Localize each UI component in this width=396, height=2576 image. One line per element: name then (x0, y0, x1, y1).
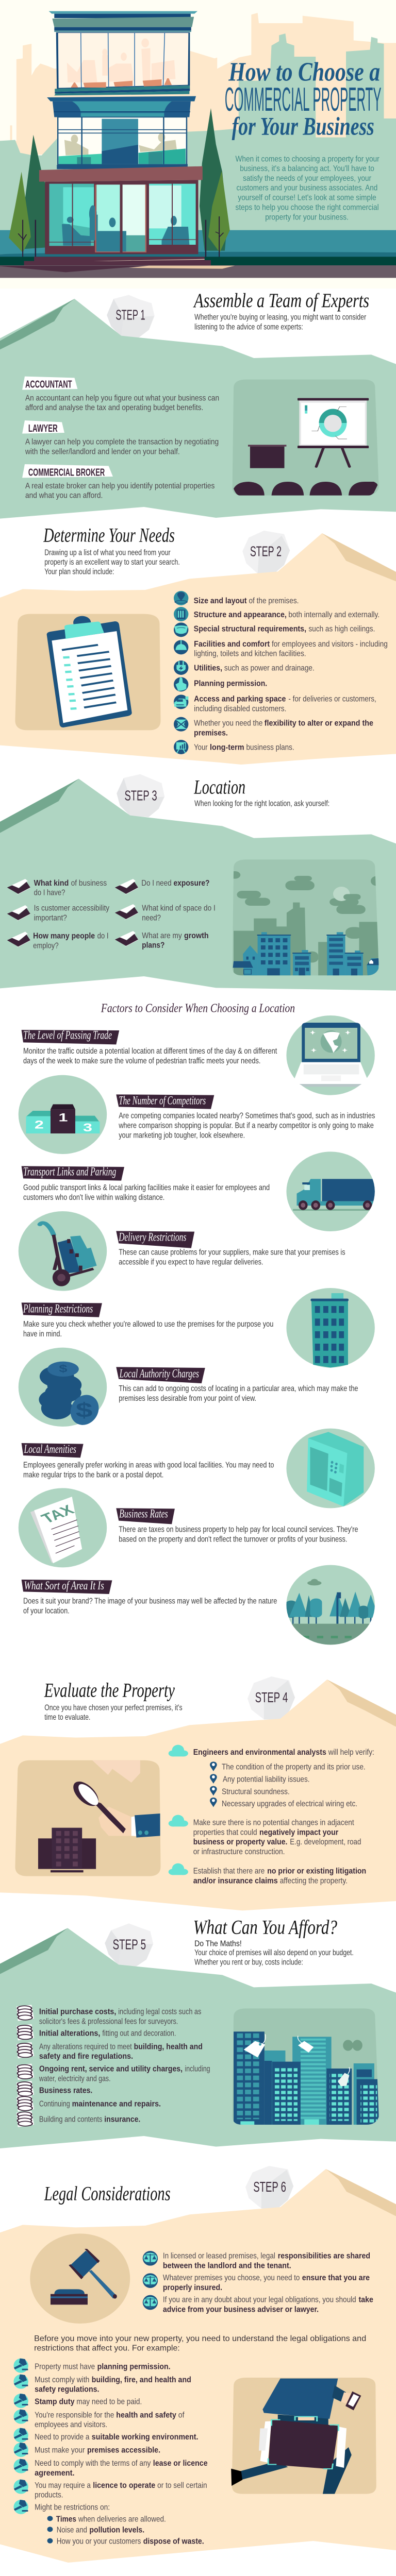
obligation: restrictions: pollution levels. (89, 2526, 144, 2535)
cost: business rates: Business rates. (39, 2086, 92, 2095)
accountant block: afford and analyse the tax and operating budget benefits. (25, 403, 203, 412)
obligation: restrictions: Noise and (57, 2526, 87, 2535)
heading: step 4: time to evaluate. (44, 1713, 90, 1722)
block: adjacent properties: negatively impact your (259, 1828, 338, 1837)
obligation: health and safety: employees and visitors. (35, 2420, 107, 2429)
heading: step 5: Do The Maths! (194, 1939, 242, 1948)
cost: ongoing rent (16, 2064, 210, 2083)
illustration: front trees (9, 171, 230, 258)
step 3 badge: STEP 3 (124, 788, 157, 804)
heading: step 3 (194, 776, 329, 808)
heading: step 2 (43, 524, 180, 577)
obligation: licence (13, 2480, 207, 2500)
section: factors part 2 (19, 1288, 375, 1567)
item: long-term plans: long-term (210, 743, 244, 752)
obligation: lease (13, 2459, 208, 2478)
step 4 badge (248, 1676, 295, 1719)
section: step 2 (0, 524, 396, 765)
cost: ongoing rent: including (185, 2064, 210, 2074)
legal point 3: take (359, 2295, 373, 2304)
legal point 1: between the landlord and the tenant. (163, 2261, 291, 2270)
cost: initial purchase (16, 2005, 201, 2026)
street foreground (0, 257, 396, 278)
item: utilities: such as power and drainage. (224, 664, 315, 673)
obligation: accessible: premises accessible. (87, 2446, 160, 2454)
obligation: working environment (13, 2428, 198, 2443)
legal point 2 (143, 2273, 370, 2292)
factor: local amenities: Local Amenities (24, 1443, 76, 1456)
step 5 badge: STEP 5 (112, 1937, 146, 1953)
section: hero (0, 0, 396, 289)
section: legal obligations (13, 2334, 376, 2546)
obligation: regulations: Must comply with (35, 2375, 89, 2384)
question: space: need? (142, 913, 161, 923)
obligation: planning permission: planning permission. (97, 2362, 171, 2371)
cost: maintenance (16, 2095, 161, 2112)
item: flexibility: premises. (194, 728, 228, 737)
obligation: licence: licence to operate (93, 2481, 155, 2490)
cost: initial purchase: including legal costs such as (118, 2007, 201, 2016)
obligation: accessible: Must make your (35, 2446, 85, 2454)
icon: coins (19, 1348, 107, 1427)
section: factors part 1 (19, 1015, 375, 1291)
item: planning permission: Planning permission. (194, 679, 267, 688)
cost: required alterations: Any alterations required to meet (39, 2042, 132, 2051)
icon: podium (19, 1075, 107, 1154)
item: utilities: Utilities, (194, 664, 222, 673)
icon: truck (286, 1151, 375, 1231)
step 3 badge (117, 774, 164, 817)
cost: insurance (16, 2111, 140, 2127)
factor: local amenities: make regular trips to the bank or a postal depot. (23, 1470, 163, 1479)
block: litigation: Establish that there are (193, 1867, 265, 1876)
commercial broker block: and what you can afford. (25, 491, 103, 500)
obligation: working environment: Need to provide a (35, 2432, 90, 2442)
question: what kind of business: What kind (34, 878, 69, 888)
obligation: stamp duty: may need to be paid. (76, 2397, 142, 2406)
item: structure and appearance: Structure and appearance, (194, 610, 287, 619)
cost: maintenance: Continuing (39, 2099, 70, 2109)
cost: required alterations: building, health and (134, 2042, 203, 2051)
factor: business rates (116, 1507, 358, 1544)
obligation: lease: lease or licence (153, 2459, 208, 2468)
factor: passing trade (22, 1029, 277, 1065)
item: long-term plans: Your (194, 743, 208, 752)
obligation: planning permission: Property must have (35, 2362, 95, 2371)
obligation: regulations: building, fire, and health and (92, 2375, 191, 2384)
heading: step 2: Drawing up a list of what you need from your (44, 548, 171, 557)
cost: required alterations: safety and fire regulations. (39, 2052, 133, 2061)
step 4 badge: STEP 4 (255, 1690, 288, 1705)
factor: transport links: customers who don't live within walking distance. (23, 1193, 164, 1202)
item: facilities and comfort: Facilities and comfort (194, 639, 270, 649)
item: special structural requirements (174, 622, 375, 637)
factor: transport links (22, 1165, 270, 1202)
illustration: magnifying glass over building (15, 1760, 161, 1876)
factor: planning restrictions: Planning Restrictions (23, 1302, 93, 1315)
section: step 5 end and step 6 (0, 2008, 396, 2563)
factor: passing trade: The Level of Passing Trade (23, 1029, 112, 1042)
obligation: health and safety (13, 2410, 185, 2429)
cost: ongoing rent: Ongoing rent, service and utility charges, (39, 2064, 183, 2074)
factor: what sort of area: of your location. (23, 1606, 70, 1615)
block: engineers checklist (169, 1745, 374, 1808)
factor: planning restrictions: have in mind. (23, 1329, 62, 1338)
legal point 1 (143, 2251, 370, 2270)
item: size and layout (174, 591, 299, 605)
legal intro (34, 2334, 366, 2353)
obligation: restrictions: Times (56, 2515, 76, 2523)
obligation: accessible (13, 2443, 160, 2457)
title (225, 57, 382, 141)
item: long-term plans: business plans. (246, 743, 294, 752)
factor: business rates: Business Rates (119, 1507, 168, 1520)
section: step 3 (0, 774, 396, 1015)
legal point 3 (143, 2295, 373, 2314)
obligation: lease: agreement. (35, 2468, 74, 2478)
legal point 2: Whatever premises you choose, you need to (163, 2273, 300, 2282)
step 6 badge (245, 2166, 293, 2209)
section: step 1 (0, 257, 396, 519)
obligation: restrictions: Might be restrictions on: (35, 2503, 110, 2512)
obligation: health and safety: health and safety (116, 2411, 176, 2419)
icon: hand truck (19, 1211, 107, 1291)
accountant block: ACCOUNTANT (25, 378, 72, 390)
block: adjacent properties (169, 1815, 361, 1856)
heading: step 2: property is an excellent way to start your search. (44, 557, 180, 567)
legal intro: restrictions that affect you. For example: (34, 2344, 180, 2353)
step 6 badge: STEP 6 (253, 2179, 286, 2195)
question: growth plans (115, 931, 209, 950)
cost: initial alterations: Initial alterations, (39, 2029, 100, 2038)
item: size and layout: of the premises. (249, 596, 299, 605)
cost: business rates (16, 2081, 92, 2097)
panel: step 4 mountain (0, 1680, 396, 1910)
panel: step 1 mountain (0, 299, 396, 519)
illustration: clipboard (15, 614, 161, 730)
cost: initial alterations (16, 2024, 176, 2040)
panel: step 5 mountain (0, 1928, 396, 2148)
icon: tax form: TAX (38, 1502, 77, 1526)
question: what kind of business (7, 878, 107, 897)
obligation: health and safety: of (178, 2411, 185, 2419)
question: growth plans: growth (184, 931, 209, 940)
question: growth plans: plans? (142, 941, 164, 950)
heading: step 4 (44, 1679, 183, 1722)
question: how many people: How many people (33, 931, 95, 941)
illustration: back trees (23, 108, 227, 258)
section: area and step 4 (0, 1565, 396, 1910)
obligation: restrictions: dispose of waste. (143, 2537, 204, 2546)
icon: office tower (286, 1288, 375, 1368)
obligation: stamp duty: Stamp duty (35, 2397, 75, 2406)
question: what kind of business: do I have? (34, 888, 65, 897)
obligation: licence: products. (35, 2490, 63, 2500)
factor: what sort of area: What Sort of Area It Is (24, 1579, 104, 1592)
cost: initial purchase: solicitor's fees & professional fees for surveyors. (39, 2017, 178, 2026)
heading: step 4: Evaluate the Property (44, 1679, 175, 1701)
factor: local authority charges: Local Authority Charges (119, 1367, 199, 1380)
item: long-term plans (174, 740, 294, 754)
illustration: city with price tags (233, 2008, 379, 2125)
heading: step 2: Determine Your Needs (43, 524, 175, 546)
question: customer accessibility: Is customer accessibility (34, 904, 109, 913)
block: adjacent properties: or infrastructure construction. (193, 1847, 285, 1856)
question: customer accessibility (7, 904, 109, 923)
obligation: stamp duty (13, 2394, 142, 2408)
block: engineers checklist: Any potential liability issues. (223, 1775, 309, 1784)
obligation: restrictions: How you or your customers (57, 2537, 141, 2546)
commercial broker block: A real estate broker can help you identify potential properties (25, 481, 214, 490)
illustration: city (229, 859, 382, 975)
illustration: commercial building (39, 11, 203, 254)
obligation: restrictions (13, 2500, 204, 2546)
factor: delivery restrictions (116, 1230, 345, 1267)
heading: step 5 (193, 1916, 354, 1967)
question: exposure: Do I need (141, 878, 172, 888)
factor: planning restrictions (22, 1302, 273, 1338)
panel: step 3 mountain (0, 779, 396, 991)
icon: coins: $ (59, 1363, 68, 1375)
intro text (235, 155, 380, 222)
panel: step 6 mountain (0, 2169, 396, 2563)
question: growth plans: What are my (142, 931, 182, 940)
item: flexibility (174, 717, 373, 737)
cost: insurance: Building and contents (39, 2115, 102, 2124)
question: space: What kind of space do I (142, 904, 216, 913)
icon: podium: 3 (83, 1121, 92, 1134)
obligation: licence: You may require a (35, 2481, 91, 2490)
item: facilities and comfort (174, 639, 388, 658)
illustration: businessman with briefcase (231, 2378, 376, 2494)
item: access and parking: Access and parking space (194, 694, 286, 704)
obligation: restrictions: when deliveries are allowed. (78, 2515, 166, 2523)
heading: step 2: Your plan should include: (44, 567, 114, 577)
heading: step 3: Location (194, 776, 245, 798)
item: planning permission (174, 677, 267, 691)
factor: local amenities (22, 1443, 274, 1479)
section: step 5 end and step 6: Legal Considerations (44, 2182, 171, 2205)
icon: ATM machine (286, 1429, 375, 1508)
block: litigation (169, 1863, 366, 1885)
item: special structural requirements: Special structural requirements, (194, 624, 306, 633)
accountant block (22, 377, 219, 412)
step 1 badge (107, 295, 155, 337)
obligation: health and safety: You're responsible for the (35, 2411, 114, 2419)
question: space (115, 904, 216, 923)
question: how many people: do I (97, 931, 109, 941)
step 2 badge (242, 531, 290, 573)
item: structure and appearance (174, 607, 380, 621)
block: litigation: and/or insurance claims (193, 1876, 278, 1885)
legal point 2: properly insured. (163, 2283, 222, 2292)
question: how many people (7, 931, 109, 950)
factor: competitors: your marketing job tougher, look elsewhere. (119, 1131, 245, 1140)
obligation: lease: Need to comply with the terms of any (35, 2459, 151, 2468)
item: size and layout: Size and layout (194, 596, 247, 605)
factor: local authority charges (116, 1367, 358, 1403)
item: facilities and comfort: lighting, toilets and kitchen facilities. (194, 649, 306, 658)
lawyer block: LAWYER (28, 422, 58, 434)
step 1 badge: STEP 1 (116, 308, 145, 323)
factor: competitors: The Number of Competitors (119, 1094, 206, 1107)
icon: laptop (286, 1015, 375, 1095)
factor: competitors (116, 1094, 375, 1140)
panel: step 2 mountain (0, 533, 396, 765)
step 2 badge: STEP 2 (250, 544, 282, 560)
item: utilities (174, 660, 315, 675)
cost: required alterations (16, 2042, 203, 2061)
icon: tax form (19, 1488, 107, 1567)
factor: local authority charges: premises less desirable from your point of view. (119, 1394, 256, 1403)
lawyer block (22, 420, 219, 456)
block: engineers checklist: Structural soundness. (222, 1787, 290, 1796)
icon: podium: 2 (35, 1118, 44, 1131)
cost: initial alterations: fitting out and decoration. (102, 2029, 176, 2038)
heading: step 1 (193, 289, 369, 331)
factor: transport links: Transport Links and Parking (23, 1165, 116, 1178)
obligation: regulations: safety regulations. (35, 2385, 99, 2394)
block: adjacent properties: properties that could (193, 1828, 257, 1837)
question: what kind of business: of business (71, 878, 107, 888)
cost: maintenance: maintenance and repairs. (72, 2099, 161, 2109)
commercial broker block (22, 464, 214, 500)
block: litigation: affecting the property. (280, 1876, 348, 1885)
cost: initial purchase: Initial purchase costs, (39, 2007, 116, 2016)
obligation: licence: or to sell certain (157, 2481, 207, 2490)
illustration: presentation room (233, 380, 379, 496)
lawyer block: A lawyer can help you complete the transaction by negotiating (25, 437, 219, 447)
cost: ongoing rent: water, electricity and gas. (39, 2074, 111, 2083)
commercial broker block: COMMERCIAL BROKER (28, 466, 105, 478)
question: exposure (115, 878, 210, 895)
lawyer block: with the seller/landlord and lender on your behalf. (25, 447, 180, 456)
item: access and parking (174, 694, 376, 713)
icon: coins: $ (76, 1398, 92, 1421)
item: flexibility: Whether you need the (194, 719, 262, 728)
factor: what sort of area (22, 1579, 277, 1615)
question: exposure: exposure? (173, 878, 210, 888)
step 5 badge (105, 1923, 153, 1967)
heading: step 4: Once you have chosen your perfect premises, it's (44, 1703, 183, 1712)
cost: insurance: insurance. (104, 2115, 140, 2124)
item: access and parking: including disabled customers. (194, 704, 286, 713)
icon: podium: 1 (58, 1111, 68, 1124)
obligation: planning permission (13, 2359, 171, 2373)
section: step 4 end and step 5 (0, 1815, 396, 2148)
legal point 1: In licensed or leased premises, legal (163, 2251, 275, 2260)
factor: delivery restrictions: accessible if you expect to have regular deliveries. (119, 1258, 263, 1267)
accountant block: An accountant can help you figure out what your business can (25, 394, 219, 402)
icon: park (285, 1565, 379, 1646)
factor: delivery restrictions: Delivery Restrictions (119, 1230, 186, 1244)
hero background skyline (0, 0, 396, 289)
obligation: regulations (13, 2375, 191, 2394)
block: adjacent properties: business or property value. (193, 1837, 287, 1846)
illustration: gavel (30, 2233, 130, 2324)
question: customer accessibility: important? (34, 913, 67, 923)
obligation: working environment: suitable working environment. (92, 2432, 198, 2442)
question: how many people: employ? (33, 941, 59, 950)
